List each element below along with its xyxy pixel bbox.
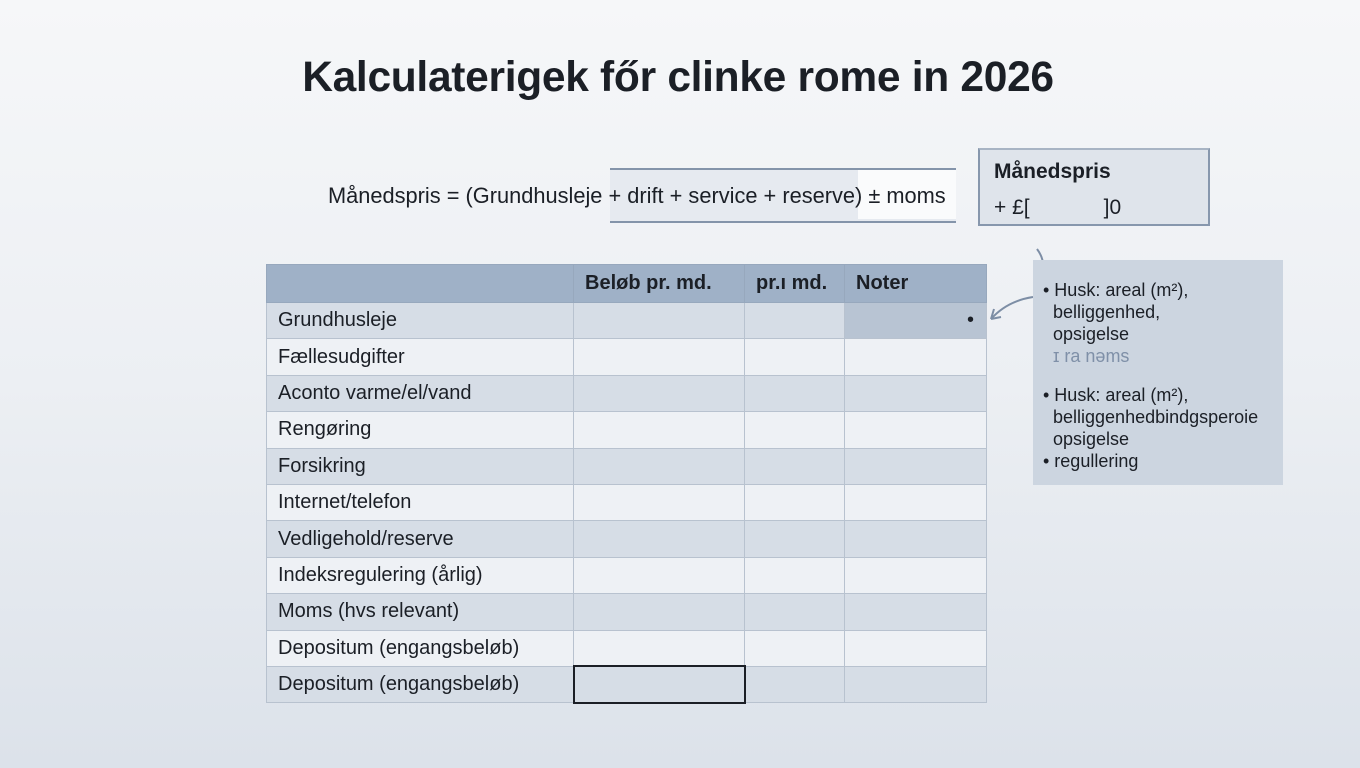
arrow: notes to table: [990, 248, 1044, 320]
cost table: Aconto varme/el/vand: [278, 382, 471, 404]
cost table: •: [967, 309, 974, 331]
cost table: Moms (hvs relevant): [278, 600, 459, 622]
cost table: Depositum (engangsbeløb): [278, 637, 519, 659]
notes panel: [1033, 260, 1283, 485]
cost table: Indeksregulering (årlig): [278, 564, 483, 586]
notes panel: ɪ ra nəms: [1053, 346, 1129, 366]
notes panel: • Husk: areal (m²),: [1043, 385, 1188, 405]
cost table: Fællesudgifter: [278, 346, 405, 368]
price box: Månedspris: [994, 160, 1111, 183]
formula bar: [328, 168, 956, 223]
notes panel: • regullering: [1043, 451, 1138, 471]
cost table: Beløb pr. md.: [585, 272, 712, 294]
cost table: Depositum (engangsbeløb): [278, 673, 519, 695]
notes panel: opsigelse: [1053, 429, 1129, 449]
title: Kalculaterigek főr clinke rome in 2026: [302, 54, 1054, 101]
formula text: Månedspris = (Grundhusleje + drift + service + reserve) ± moms: [328, 183, 946, 208]
cost table: Noter: [856, 272, 908, 294]
notes panel: • Husk: areal (m²),: [1043, 280, 1188, 300]
notes panel: belliggenhed,: [1053, 302, 1160, 322]
cost table: Grundhusleje: [278, 309, 397, 331]
cost table: Forsikring: [278, 455, 366, 477]
price box: [978, 148, 1210, 226]
cost table: pr.ı md.: [756, 272, 827, 294]
price box: + £[ ]0: [994, 196, 1121, 219]
cost table: Internet/telefon: [278, 491, 411, 513]
cost table: Vedligehold/reserve: [278, 528, 454, 550]
notes panel: belliggenhedbindgsperoie: [1053, 407, 1258, 427]
notes panel: opsigelse: [1053, 324, 1129, 344]
cost table: [266, 264, 987, 704]
cost table: Rengøring: [278, 418, 371, 440]
